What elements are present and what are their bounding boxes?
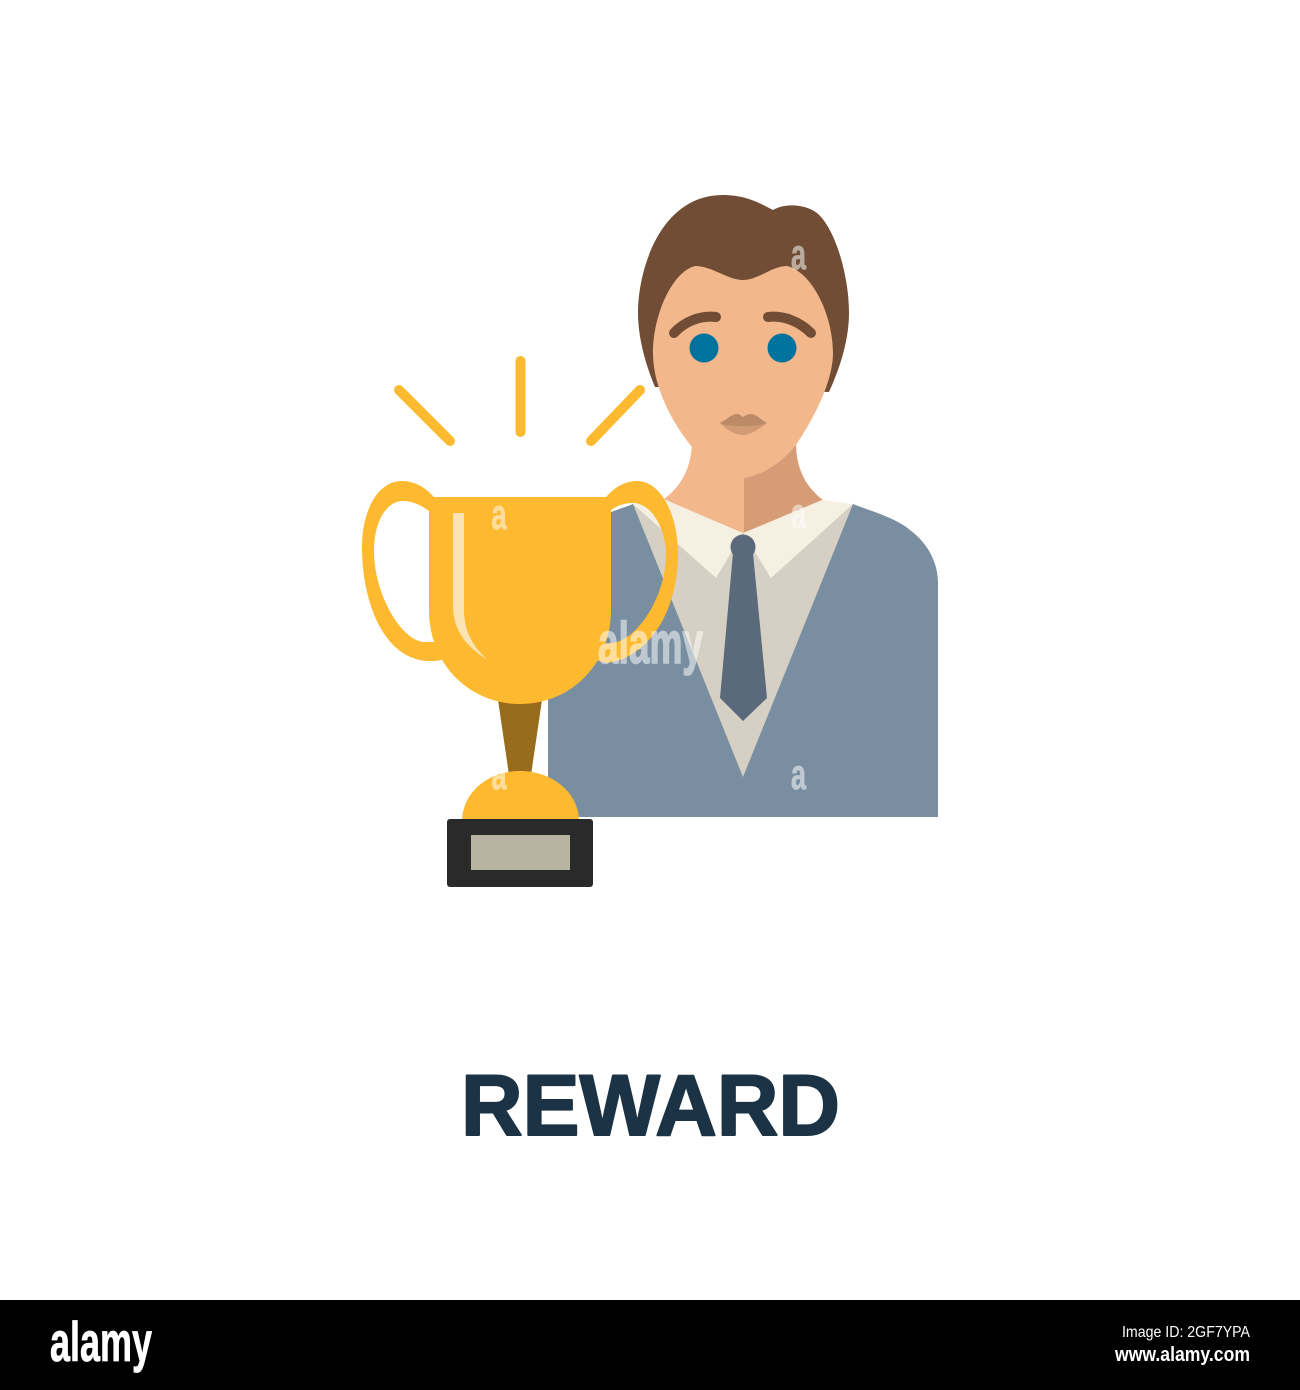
- website: www.alamy.com: [1114, 1344, 1250, 1366]
- shirt: [633, 504, 853, 777]
- cup highlight: [453, 513, 488, 660]
- eyebrows: [674, 317, 811, 333]
- stem: [498, 700, 542, 775]
- icon: trophy: [362, 361, 678, 887]
- footer logo: alamy: [50, 1310, 152, 1373]
- icon: businessman: [548, 195, 938, 817]
- title: REWARD: [461, 1058, 840, 1154]
- plinth: [447, 819, 593, 887]
- collar: [633, 500, 853, 578]
- eyes: [690, 334, 796, 362]
- tie: [720, 534, 767, 721]
- cup: [429, 497, 611, 704]
- watermarks: a: [791, 751, 807, 799]
- face: [653, 266, 833, 478]
- dome base: [462, 771, 579, 819]
- sweater: [548, 504, 938, 817]
- footer bar: [0, 1300, 1300, 1390]
- watermarks: a: [492, 751, 507, 799]
- name plate: [471, 835, 570, 870]
- right handle: [595, 481, 678, 663]
- image id: Image ID: 2GF7YPA: [1122, 1324, 1250, 1341]
- lips: [720, 414, 767, 435]
- watermarks: [492, 231, 807, 799]
- hair: [638, 195, 849, 392]
- watermarks: a: [492, 491, 507, 539]
- neck: [664, 440, 824, 536]
- watermarks: a: [791, 490, 807, 538]
- left handle: [362, 481, 444, 661]
- watermarks: alamy: [598, 611, 703, 676]
- shine rays: [399, 361, 640, 441]
- watermarks: a: [791, 231, 807, 279]
